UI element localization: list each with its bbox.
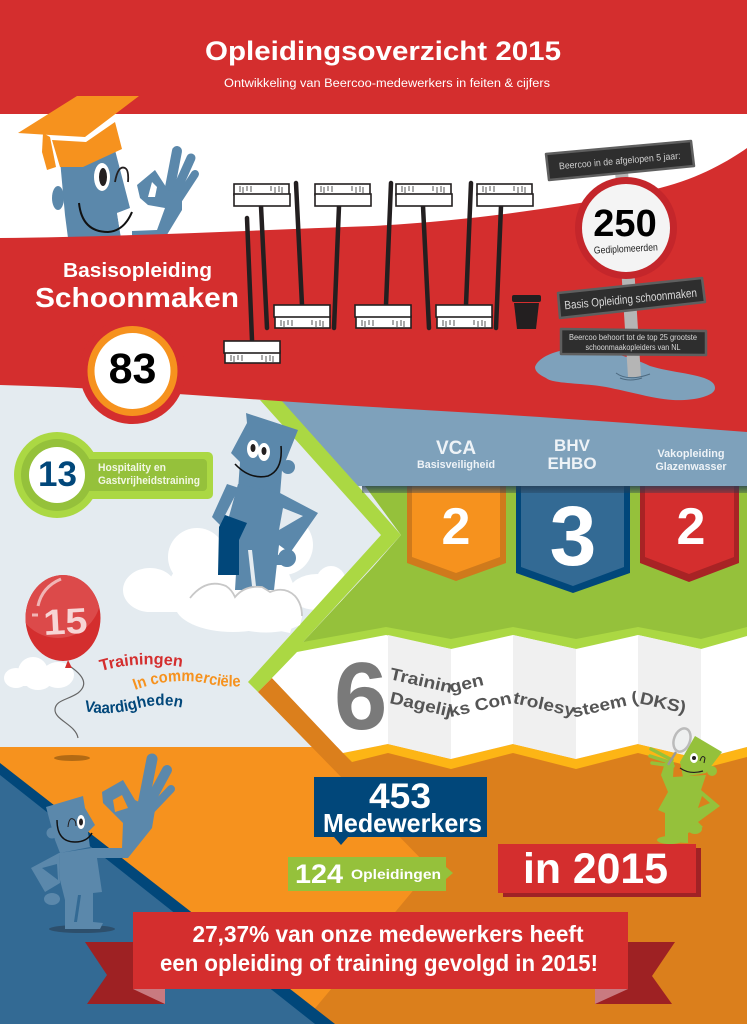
badge: 13 Hospitality en Gastvrijheidstraining: Hospitality en [98, 462, 166, 474]
background: dark orange area [258, 678, 747, 1024]
folder [218, 515, 247, 575]
fingers [650, 749, 673, 766]
callout: 453 Medewerkers: 453 [369, 777, 431, 816]
text: Trainingen in commerciele vaardigheden [86, 652, 240, 714]
sign: Basis Opleiding schoonmaken: Basis Opleiding schoonmaken [564, 286, 697, 312]
sign: Beercoo in de afgelopen 5 jaar: Beercoo in de afgelopen 5 jaar: [559, 151, 681, 172]
traffic sign: 250 Gediplomeerden: Gediplomeerden [594, 242, 658, 257]
shield: blue BHV count [516, 486, 630, 593]
sign: top 25 schoonmaakopleiders: schoonmaakopleiders van NL [586, 343, 681, 352]
sign: Beercoo in de afgelopen 5 jaar [546, 141, 694, 180]
mascot: OK sign on blue [31, 759, 171, 933]
shield: orange VCA count: 2 [442, 498, 470, 556]
panel: blue header band [281, 400, 747, 486]
mascot: standing with folder on cloud [190, 413, 318, 632]
shield: red glazenwasser count [640, 486, 739, 582]
badge: 13 Hospitality en Gastvrijheidstraining: Gastvrijheidstraining [98, 475, 200, 487]
heading: BHV EHBO [547, 436, 597, 473]
text: Trainingen in commerciele vaardigheden: Vaardigheden [86, 694, 182, 714]
heading: VCA Basisveiligheid: Basisveiligheid [417, 459, 495, 471]
subtitle: Ontwikkeling van Beercoo-medewerkers in feiten & cijfers [224, 78, 550, 90]
ribbon: left tail [85, 942, 165, 1004]
callout: in 2015: in 2015 [523, 845, 668, 893]
graduation cap [18, 96, 139, 170]
background: light grey-blue middle section [0, 375, 747, 747]
badge: 83 [80, 318, 186, 424]
badge: 83: 83 [109, 345, 156, 393]
hand [168, 151, 195, 200]
callout: 124 Opleidingen [288, 857, 453, 891]
badge: 13 Hospitality en Gastvrijheidstraining: 13 [38, 455, 77, 494]
brooms illustration [224, 183, 541, 363]
banner: 27,37% conclusion [133, 912, 628, 989]
mascot: green with magnifier [650, 726, 722, 844]
heading: BHV EHBO: EHBO [547, 454, 597, 473]
balloon shadow [54, 755, 90, 761]
heading: Vakopleiding Glazenwasser [656, 448, 727, 473]
blue triangle bottom-left [0, 763, 335, 1024]
sign: top 25 schoonmaakopleiders [561, 329, 706, 355]
background: orange lower section [0, 747, 747, 1024]
heading: Basisopleiding Schoonmaken: Schoonmaken [35, 282, 239, 313]
balloon with 15: 15 [42, 600, 88, 643]
heading: Vakopleiding Glazenwasser: Glazenwasser [656, 461, 727, 473]
heading: Basisopleiding Schoonmaken [35, 260, 239, 313]
text: Trainingen in commerciele vaardigheden: Trainingen [98, 652, 182, 670]
callout: 124 Opleidingen: 124 [295, 859, 343, 889]
callout: 124 Opleidingen: Opleidingen [351, 866, 441, 882]
heading: Vakopleiding Glazenwasser: Vakopleiding [658, 448, 724, 460]
sign: Basis Opleiding schoonmaken [558, 278, 705, 318]
traffic sign: 250 Gediplomeerden [575, 177, 677, 279]
heading: Basisopleiding Schoonmaken: Basisopleiding [63, 260, 212, 282]
balloon with 15 [26, 575, 100, 738]
text: Dagelijks Controlesysteem: Dagelijks Controlesysteem (DKS) [390, 690, 685, 720]
ribbon: right tail [590, 942, 675, 1004]
puddle [535, 350, 715, 400]
top title bar [0, 0, 747, 114]
callout: 453 Medewerkers [314, 777, 487, 845]
shield: blue BHV count: 3 [550, 489, 596, 583]
background: white upper section [0, 0, 747, 400]
cloud: large cloud behind mascot [123, 515, 346, 633]
panel: green training area [297, 486, 747, 660]
number: 6: 6 [334, 643, 387, 750]
heading: VCA Basisveiligheid [417, 438, 495, 471]
callout: 453 Medewerkers: Medewerkers [323, 808, 482, 838]
heading: VCA Basisveiligheid: VCA [436, 438, 476, 459]
text: Trainingen DKS: Trainingen [391, 668, 484, 696]
badge: 13 Hospitality en Gastvrijheidstraining [14, 432, 213, 518]
bucket [512, 295, 541, 329]
callout: in 2015 [498, 844, 701, 897]
cloud: small cloud behind balloon [4, 657, 74, 690]
shield: orange VCA count [407, 486, 506, 581]
mascot: graduate with OK hand [18, 96, 195, 238]
OK hand [143, 759, 171, 810]
heading: BHV EHBO: BHV [554, 436, 591, 455]
yellow border under paper [343, 744, 747, 769]
banner: 27,37% conclusion: 27,37% van onze medewerkers heeft [192, 921, 584, 947]
lime chevron border [248, 400, 747, 692]
panel: red wave Basisopleiding [0, 148, 747, 432]
banner: 27,37% conclusion: een opleiding of training gevolgd in 2015! [160, 950, 598, 976]
title: Opleidingsoverzicht 2015 [205, 36, 561, 66]
panel: folded paper DKS [272, 635, 747, 759]
sign post [615, 170, 650, 380]
front cloud [190, 584, 302, 632]
sign: top 25 schoonmaakopleiders: Beercoo behoort tot de top 25 grootste [569, 333, 698, 342]
magnifier [668, 726, 694, 765]
shield: red glazenwasser count: 2 [677, 498, 705, 556]
text: Trainingen in commerciele vaardigheden: In commerciële [132, 672, 240, 690]
traffic sign: 250 Gediplomeerden: 250 [593, 203, 657, 245]
